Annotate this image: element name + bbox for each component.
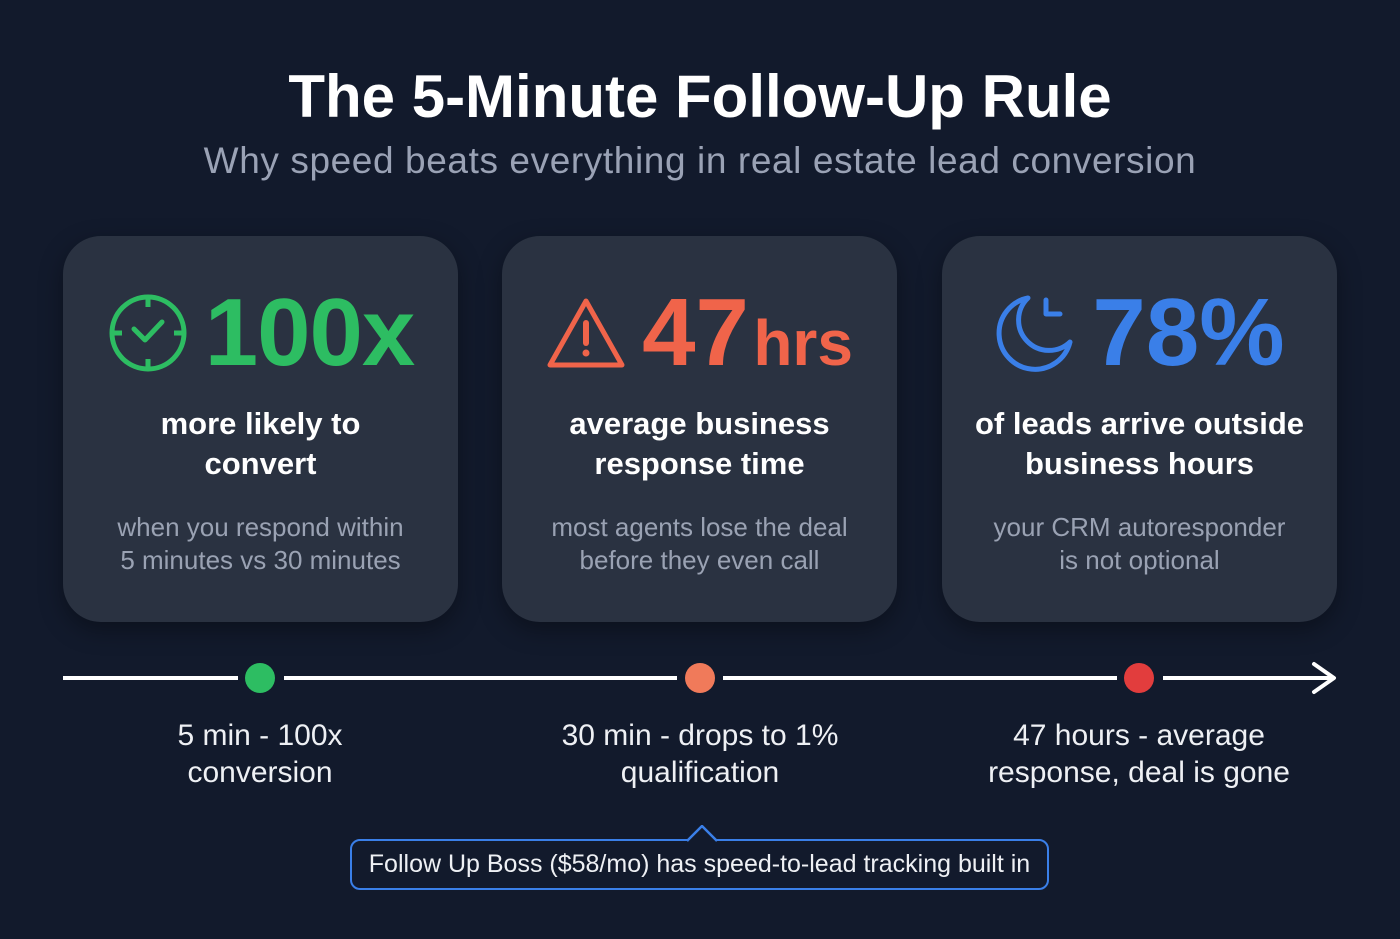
subtext: is not optional: [1059, 545, 1220, 575]
stat: 47 hrs with warning icon: [548, 279, 853, 386]
arrow head: [1314, 664, 1334, 692]
heading: [975, 406, 1304, 481]
subtext: 5 minutes vs 30 minutes: [120, 545, 401, 575]
callout notch: [687, 825, 717, 842]
heading: [569, 406, 830, 481]
stat: 100x with clock icon: [110, 279, 414, 386]
subtext: before they even call: [580, 545, 819, 575]
panel: 100x: [63, 236, 458, 622]
heading: convert: [204, 446, 316, 481]
subtext: [994, 512, 1285, 575]
dot: 47 hours: [1124, 663, 1154, 693]
heading: of leads arrive outside: [975, 406, 1304, 441]
dot: 5 min: [245, 663, 275, 693]
icon: warning triangle: [548, 298, 624, 368]
label: 47 hours: 47 hours - average: [1013, 719, 1265, 752]
stat: 100x with clock icon: 100x: [205, 279, 414, 386]
label: 5 min: 5 min - 100x: [177, 719, 343, 752]
panel: 47 hrs: [502, 236, 897, 622]
label: 5 min: conversion: [187, 756, 333, 789]
subtext: when you respond within: [117, 512, 404, 542]
label: 30 min: qualification: [621, 756, 779, 789]
timeline: [63, 662, 1336, 694]
icon: clock check: [110, 294, 186, 372]
heading: business hours: [1025, 446, 1254, 481]
label: 5 min: [177, 719, 343, 789]
title: The 5-Minute Follow-Up Rule: [288, 63, 1112, 130]
subtext: your CRM autoresponder: [994, 512, 1285, 542]
dot: 30 min: [685, 663, 715, 693]
label: 47 hours: response, deal is gone: [988, 756, 1290, 789]
stat: 47 hrs with warning icon: 47 hrs: [642, 279, 853, 386]
label: 30 min: [562, 719, 838, 789]
callout: Follow Up Boss ($58/mo) has speed-to-lead tracking built in: [369, 850, 1030, 878]
heading: response time: [594, 446, 805, 481]
stat: 78% with moon icon: 78%: [1092, 279, 1285, 386]
subtext: [117, 512, 404, 575]
heading: average business: [569, 406, 830, 441]
icon: moon clock: [996, 296, 1072, 372]
callout: [350, 839, 1049, 890]
subtext: [551, 512, 848, 575]
label: 47 hours: [988, 719, 1290, 789]
subtitle: Why speed beats everything in real estate lead conversion: [204, 140, 1196, 181]
heading: more likely to: [161, 406, 360, 441]
label: 30 min: 30 min - drops to 1%: [562, 719, 838, 752]
stat: 78% with moon icon: [996, 279, 1285, 386]
panel: 78%: [942, 236, 1337, 622]
subtext: most agents lose the deal: [551, 512, 848, 542]
heading: [161, 406, 360, 481]
